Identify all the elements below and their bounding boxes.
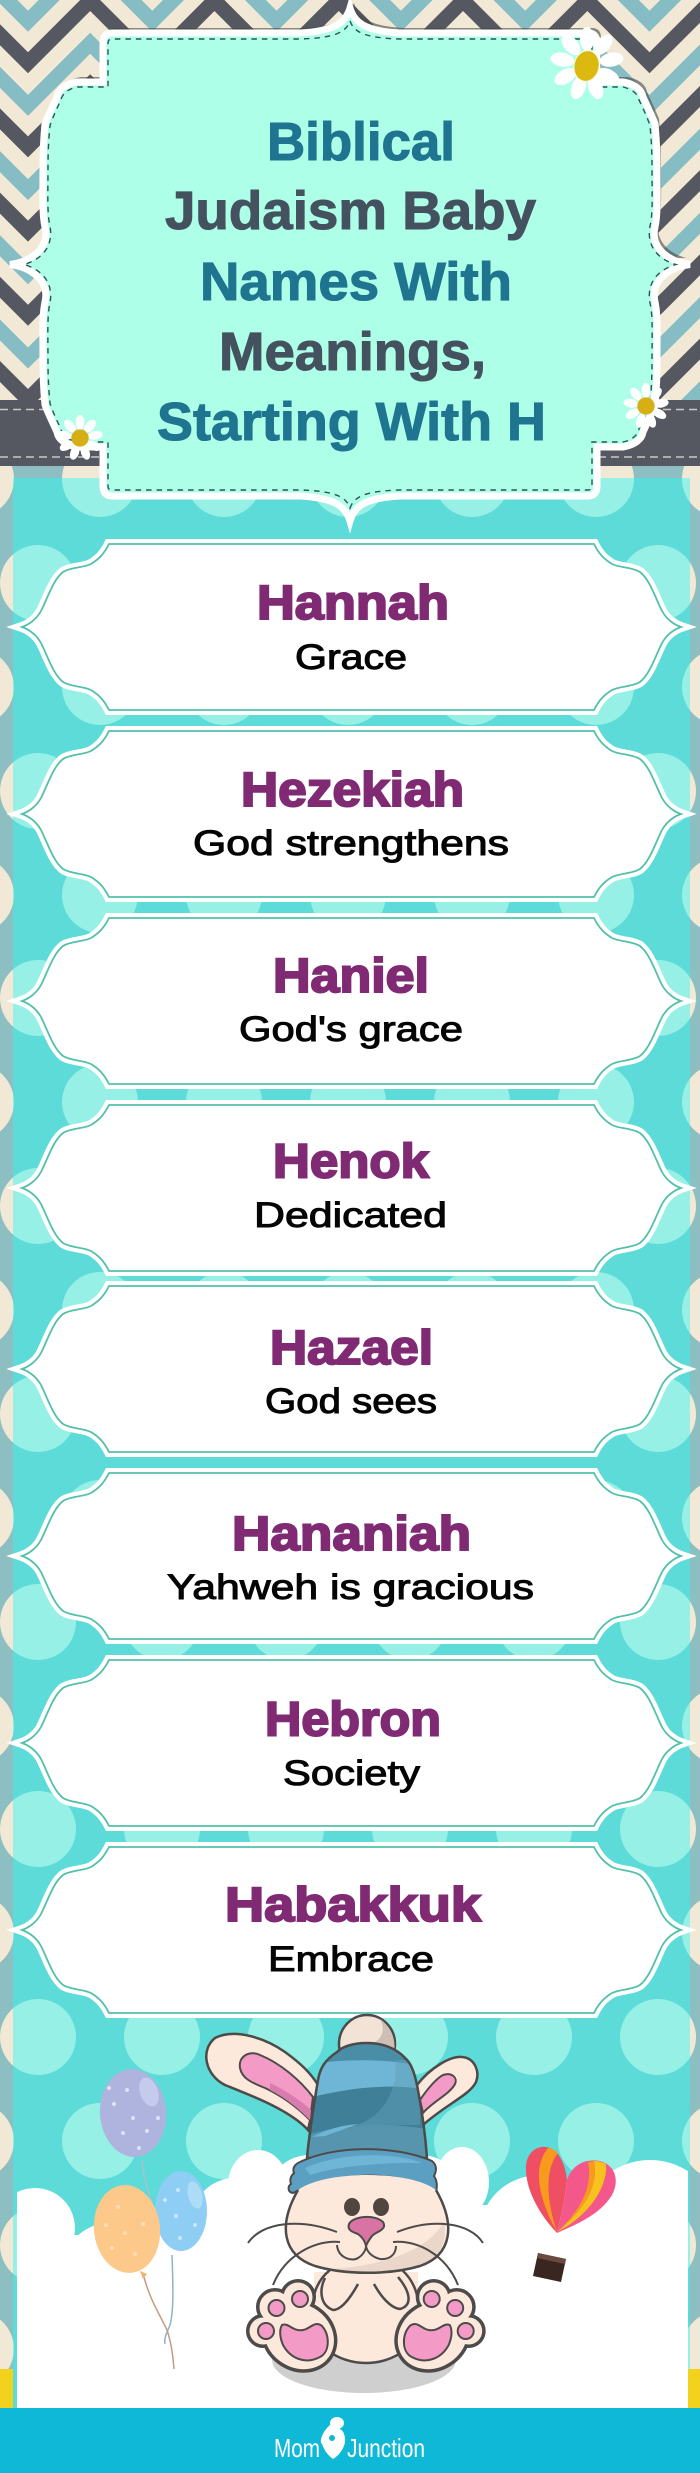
icon: heart hot air balloon — [526, 2147, 616, 2233]
left ear — [206, 2034, 318, 2130]
right ear — [417, 2057, 477, 2125]
icon: purple balloon — [97, 2067, 169, 2202]
panel: Hananiah: Hananiah — [232, 1508, 471, 1561]
panel: Hananiah — [22, 1473, 681, 1639]
white clouds — [0, 2147, 700, 2408]
title text: Meanings, — [219, 322, 486, 382]
dark stitched band — [0, 400, 700, 466]
pompom — [339, 2015, 395, 2073]
icon: daisy bottom right — [623, 383, 669, 429]
logo: MomJunction: Junction — [347, 2433, 425, 2463]
icon: balloon basket — [533, 2253, 566, 2282]
yellow edge blocks — [0, 2369, 700, 2408]
eyes — [344, 2198, 389, 2216]
illustration: bunny with hat — [206, 2015, 484, 2393]
icon: daisy bottom left — [57, 415, 103, 461]
chevron pattern — [0, 0, 700, 442]
hat — [306, 2042, 428, 2158]
title text: Names With — [200, 252, 512, 312]
panel: Hazael — [22, 1286, 681, 1452]
title text: Judaism Baby — [165, 181, 536, 241]
panel: Hananiah: Yahweh is gracious — [167, 1568, 534, 1607]
icon: orange balloon — [90, 2182, 174, 2369]
panel: Hezekiah: God strengthens — [193, 824, 509, 863]
icon: daisy top right — [549, 27, 625, 101]
footer bar — [0, 2408, 700, 2473]
panel: Henok: Dedicated — [254, 1196, 447, 1235]
panel: Hannah: Hannah — [257, 577, 449, 630]
title text: Starting With H — [157, 392, 546, 452]
nose and mouth — [337, 2217, 396, 2259]
panel: Hannah — [22, 544, 681, 710]
left foot — [248, 2281, 349, 2385]
title panel — [10, 3, 694, 521]
panel: Habakkuk: Embrace — [268, 1940, 434, 1979]
panel: Henok — [22, 1105, 681, 1271]
body — [311, 2270, 421, 2363]
panel: Hebron: Hebron — [265, 1694, 441, 1746]
panel: Habakkuk: Habakkuk — [225, 1879, 481, 1932]
icon: blue balloon — [155, 2171, 207, 2344]
panel: Hebron — [22, 1660, 681, 1826]
teal polka dot panel — [0, 441, 700, 2408]
title text — [157, 112, 546, 452]
hat brim — [289, 2149, 437, 2193]
head — [286, 2175, 448, 2273]
logo: MomJunction — [274, 2417, 425, 2463]
panel: Hezekiah: Hezekiah — [241, 764, 464, 817]
panel: Hezekiah — [22, 731, 681, 897]
panel: Hazael: God sees — [265, 1382, 437, 1421]
title text: Biblical — [267, 112, 455, 172]
panel: Haniel: Haniel — [273, 950, 429, 1003]
panel: Hebron: Society — [283, 1754, 421, 1793]
panel: Haniel — [22, 918, 681, 1084]
whiskers — [248, 2224, 483, 2285]
right foot — [383, 2281, 484, 2385]
logo: MomJunction: Mom — [274, 2433, 320, 2463]
panel: Haniel: God's grace — [239, 1010, 463, 1049]
panel: Hannah: Grace — [295, 638, 407, 677]
panel: Hazael: Hazael — [270, 1322, 433, 1375]
panel: Habakkuk — [22, 1847, 681, 2013]
polka dot underlay — [0, 441, 700, 2408]
panel: Henok: Henok — [273, 1136, 429, 1188]
